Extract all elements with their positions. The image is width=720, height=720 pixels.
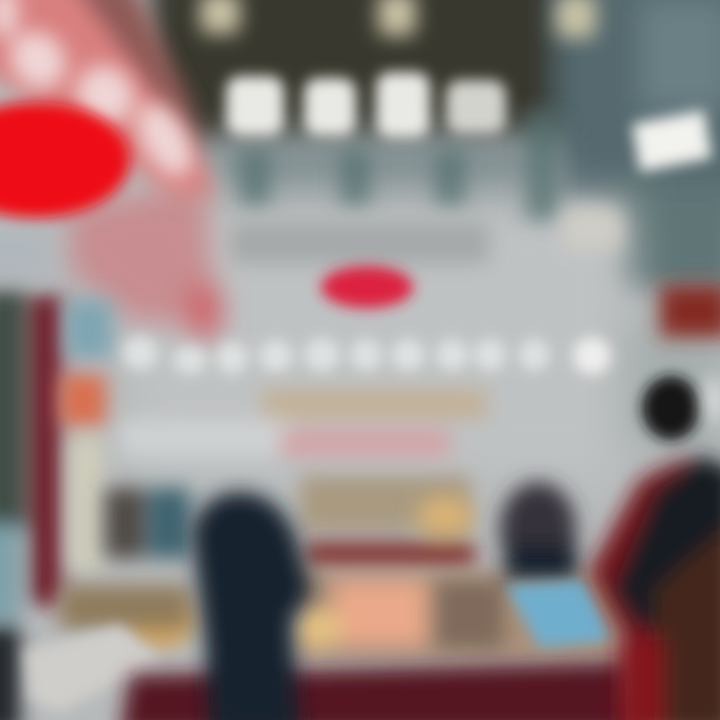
hall: pale central wall <box>130 140 720 480</box>
window light: upper right <box>632 110 712 172</box>
food counter: warm items <box>60 570 625 660</box>
laptop: blue screen <box>505 580 612 648</box>
ceiling lights: bright square row <box>226 72 506 138</box>
awning: red and pink canopy <box>0 0 212 195</box>
red sign <box>321 266 413 308</box>
person: dark figure centre left <box>192 492 312 720</box>
signage band <box>230 208 622 264</box>
awning stripes <box>0 0 204 186</box>
upright ceiling columns <box>240 110 559 220</box>
table: white paper at lower left <box>25 625 160 712</box>
left stall: dark post <box>0 235 62 720</box>
person: seated figure centre right <box>500 482 577 580</box>
person: head of standing figure <box>642 376 700 440</box>
ceiling lights: top row <box>200 0 596 38</box>
counter front: dark red band <box>120 662 640 720</box>
left stall: bright panel <box>60 300 112 571</box>
counter: lower stall shadows <box>105 488 475 568</box>
red lantern <box>0 102 130 218</box>
counter: warm shelf band <box>120 390 486 530</box>
right wall: red sign <box>660 285 720 420</box>
ceiling: dark upper area <box>150 0 720 290</box>
pink haze under awning <box>70 180 221 340</box>
person: standing figure at right <box>590 455 720 720</box>
row of lights <box>122 336 611 375</box>
